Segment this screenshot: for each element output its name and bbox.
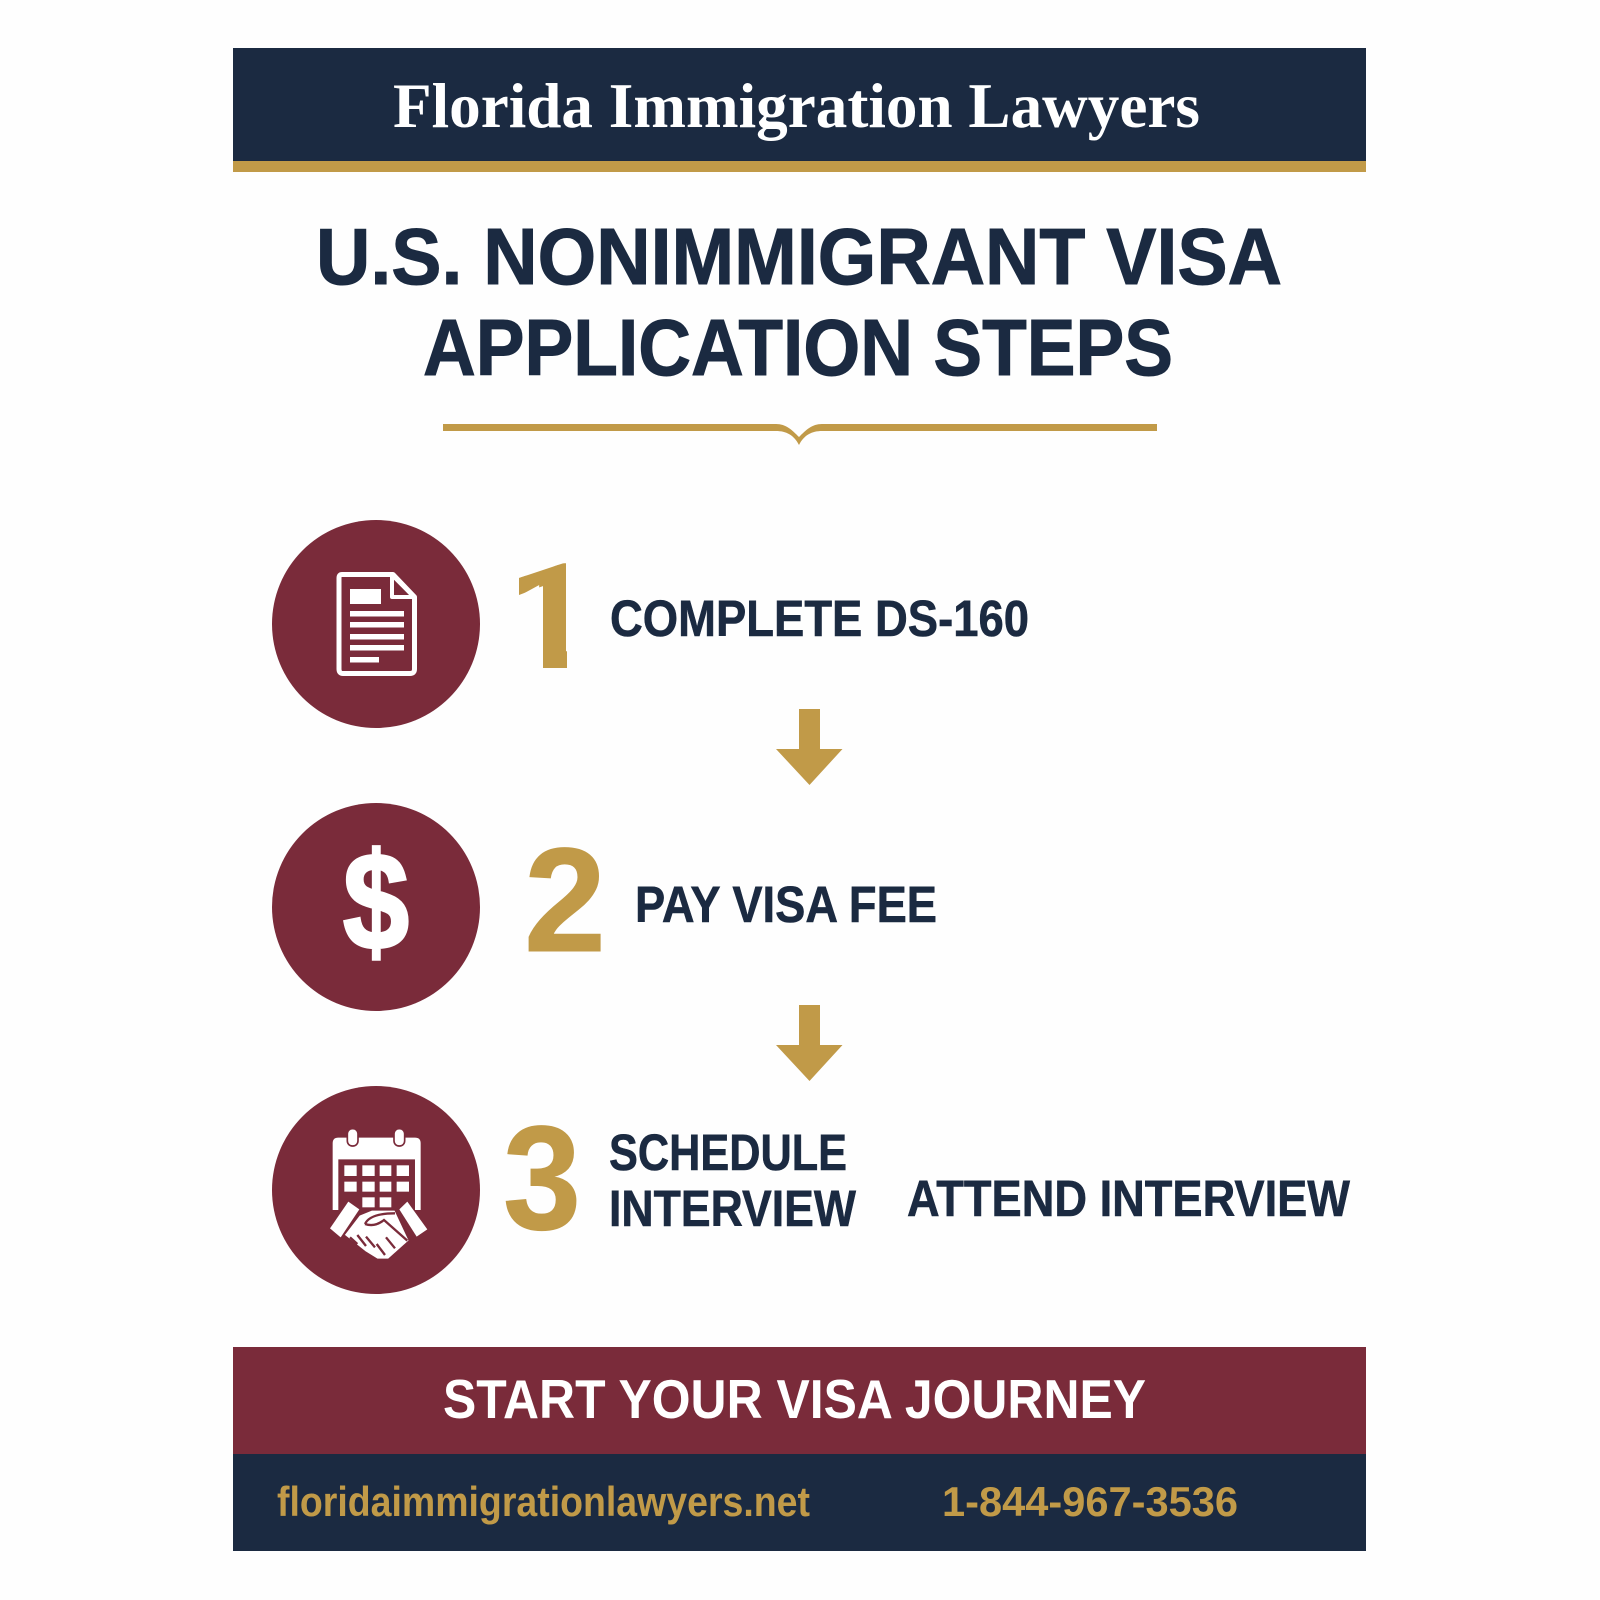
- number 1: 1: [501, 532, 596, 700]
- icon: dollar: $: [343, 825, 409, 979]
- label: schedule interview: [609, 1124, 857, 1237]
- icon: calendar and handshake: [272, 1086, 480, 1294]
- title: [316, 212, 1282, 392]
- title: APPLICATION STEPS: [423, 303, 1173, 392]
- contact bar: [233, 1454, 1366, 1551]
- label: schedule interview: INTERVIEW: [609, 1180, 857, 1237]
- call to action banner: [233, 1347, 1366, 1454]
- firm name: Florida Immigration Lawyers: [393, 71, 1200, 141]
- step 1: [272, 520, 1029, 728]
- title divider ornament: [443, 424, 1157, 445]
- header banner: [233, 48, 1366, 172]
- call to action banner: START YOUR VISA JOURNEY: [443, 1368, 1146, 1430]
- arrow 1: [776, 709, 842, 785]
- label: schedule interview: SCHEDULE: [609, 1124, 847, 1181]
- number 2: 2: [524, 818, 606, 983]
- arrow 2: [776, 1005, 842, 1081]
- icon: dollar: [272, 803, 480, 1011]
- title: U.S. NONIMMIGRANT VISA: [316, 212, 1282, 301]
- phone: 1-844-967-3536: [942, 1478, 1238, 1525]
- label: pay visa fee: PAY VISA FEE: [635, 876, 937, 933]
- website: floridaimmigrationlawyers.net: [277, 1478, 810, 1525]
- step 2: [272, 803, 937, 1011]
- number 3: 3: [503, 1096, 581, 1261]
- step 3: [272, 1086, 1351, 1294]
- label: complete DS-160: COMPLETE DS-160: [610, 590, 1029, 647]
- icon: document: [272, 520, 480, 728]
- label: attend interview: ATTEND INTERVIEW: [907, 1170, 1351, 1227]
